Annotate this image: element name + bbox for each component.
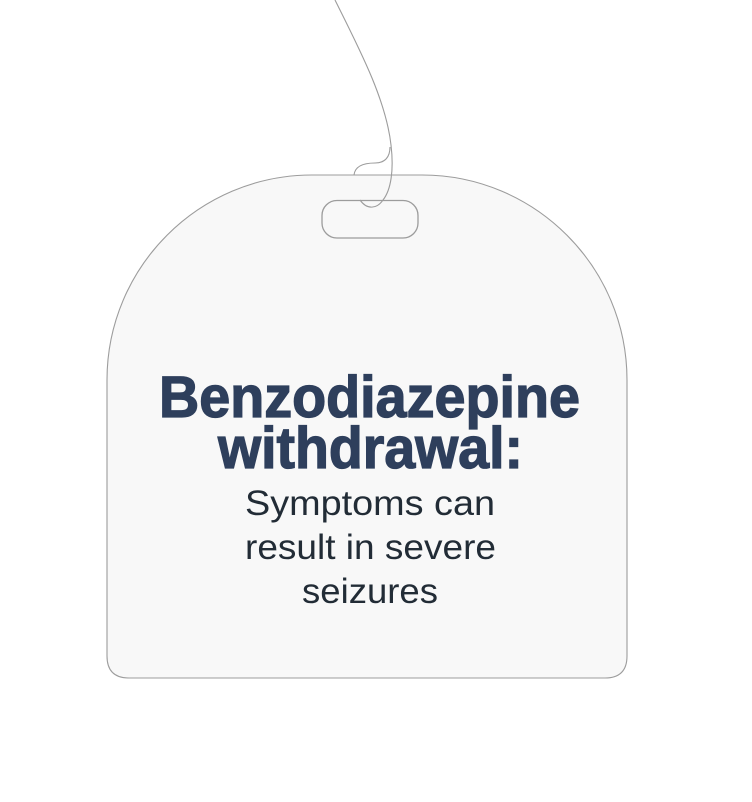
- text block: description: result in severe: [245, 528, 496, 567]
- text block: description: [245, 484, 496, 611]
- heading: withdrawal:: [217, 416, 523, 481]
- text block: description: seizures: [302, 572, 438, 611]
- heading: Benzodiazepine: [159, 365, 580, 430]
- text block: description: Symptoms can: [245, 484, 495, 523]
- heading: [159, 365, 580, 481]
- string: [335, 0, 392, 207]
- panel: hanging tag: [107, 175, 627, 678]
- tag hole: [322, 200, 418, 238]
